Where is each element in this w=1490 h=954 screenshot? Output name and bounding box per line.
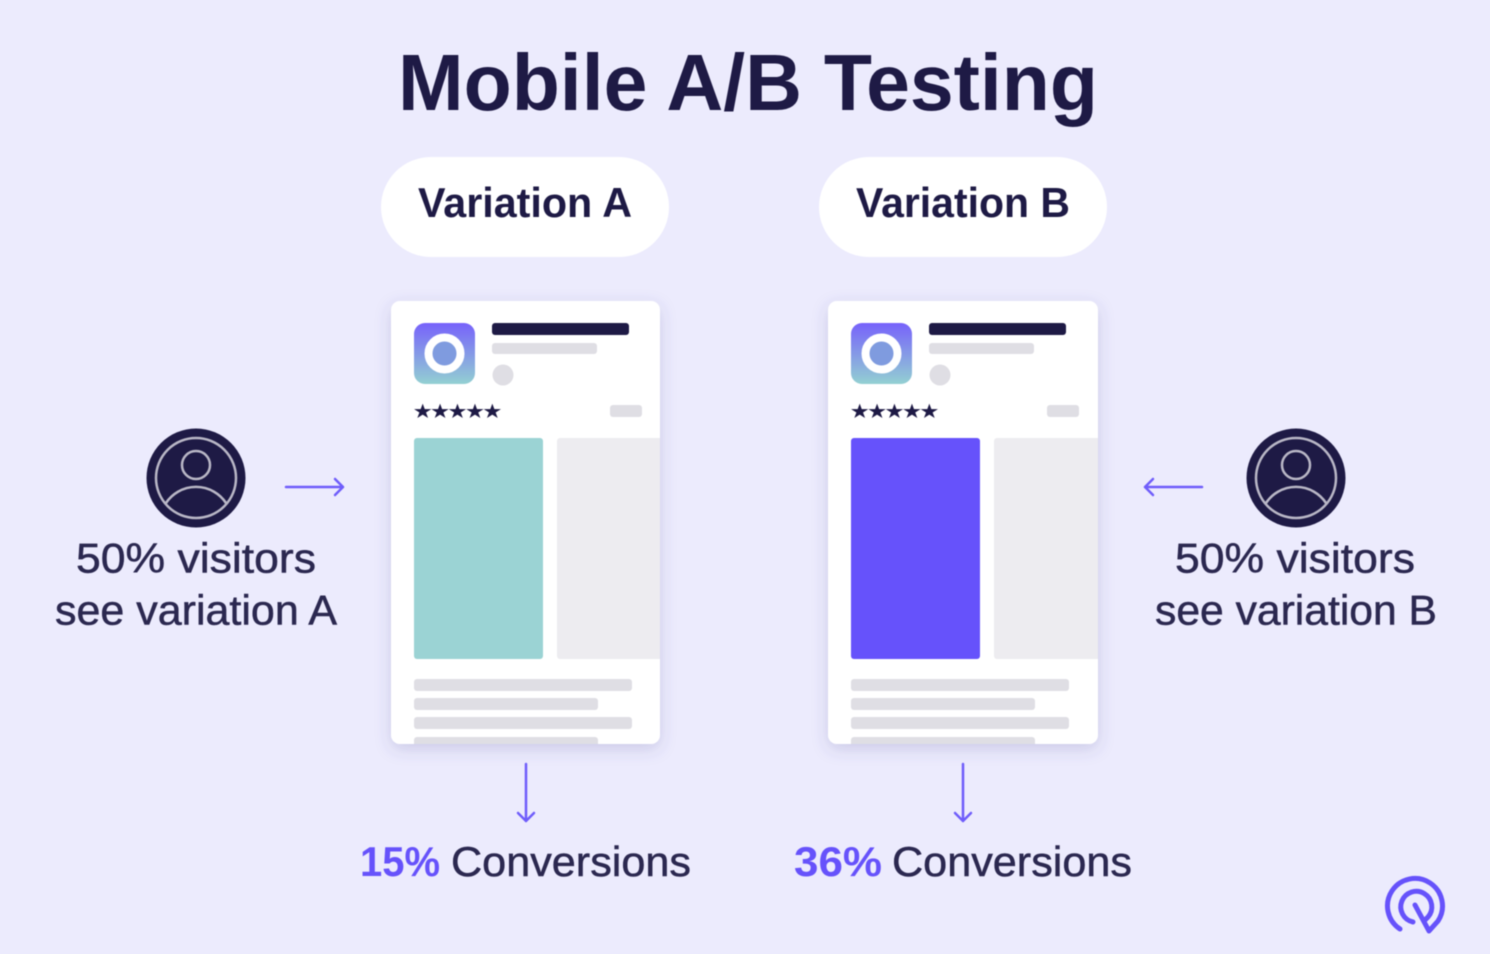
app title bar <box>929 323 1066 335</box>
screenshot: grey placeholder <box>994 438 1098 659</box>
star rating: ★★★★★ <box>851 402 938 422</box>
icon: visitor B <box>1246 428 1346 528</box>
text: visitors B caption: 50% visitors <box>1175 534 1415 582</box>
text: variation B conversions <box>794 838 1132 885</box>
text: visitors A caption: 50% visitors <box>76 534 316 582</box>
icon: brand logo <box>1387 878 1442 931</box>
text: variation A conversions: 15% <box>360 838 440 885</box>
app dot <box>492 364 514 386</box>
text: visitors B caption: see variation B <box>1155 586 1437 634</box>
text: variation B conversions: Conversions <box>892 838 1132 885</box>
text: visitors A caption <box>55 534 337 634</box>
pill: Variation B: Variation B <box>856 179 1070 226</box>
icon: app icon A <box>414 323 475 384</box>
screenshot: teal variation <box>414 438 543 659</box>
app subtitle bar <box>492 343 597 354</box>
rating tag <box>610 405 642 417</box>
text: visitors A caption: see variation A <box>55 586 337 634</box>
arrow: visitors to B <box>1145 479 1202 495</box>
text: variation A conversions: Conversions <box>451 838 691 885</box>
rating tag <box>1047 405 1079 417</box>
text: variation B conversions: 36% <box>794 838 882 885</box>
pill: Variation A <box>381 157 669 257</box>
text: visitors B caption <box>1155 534 1437 634</box>
arrow: visitors to A <box>286 479 343 495</box>
title: Mobile A/B Testing <box>398 38 1098 127</box>
pill: Variation A: Variation A <box>418 179 632 226</box>
pill: Variation B <box>819 157 1107 257</box>
app subtitle bar <box>929 343 1034 354</box>
screenshot: purple variation <box>851 438 980 659</box>
app title bar <box>492 323 629 335</box>
star rating: ★★★★★ <box>414 402 501 422</box>
icon: app icon B <box>851 323 912 384</box>
screenshot: grey placeholder <box>557 438 660 659</box>
description lines <box>851 679 1069 744</box>
panel: phone mockup B <box>828 301 1098 744</box>
description lines <box>414 679 632 744</box>
arrow: B to conversions <box>955 764 971 821</box>
arrow: A to conversions <box>518 764 534 821</box>
icon: visitor A <box>146 428 246 528</box>
panel: phone mockup A <box>391 301 660 744</box>
app dot <box>930 364 950 386</box>
